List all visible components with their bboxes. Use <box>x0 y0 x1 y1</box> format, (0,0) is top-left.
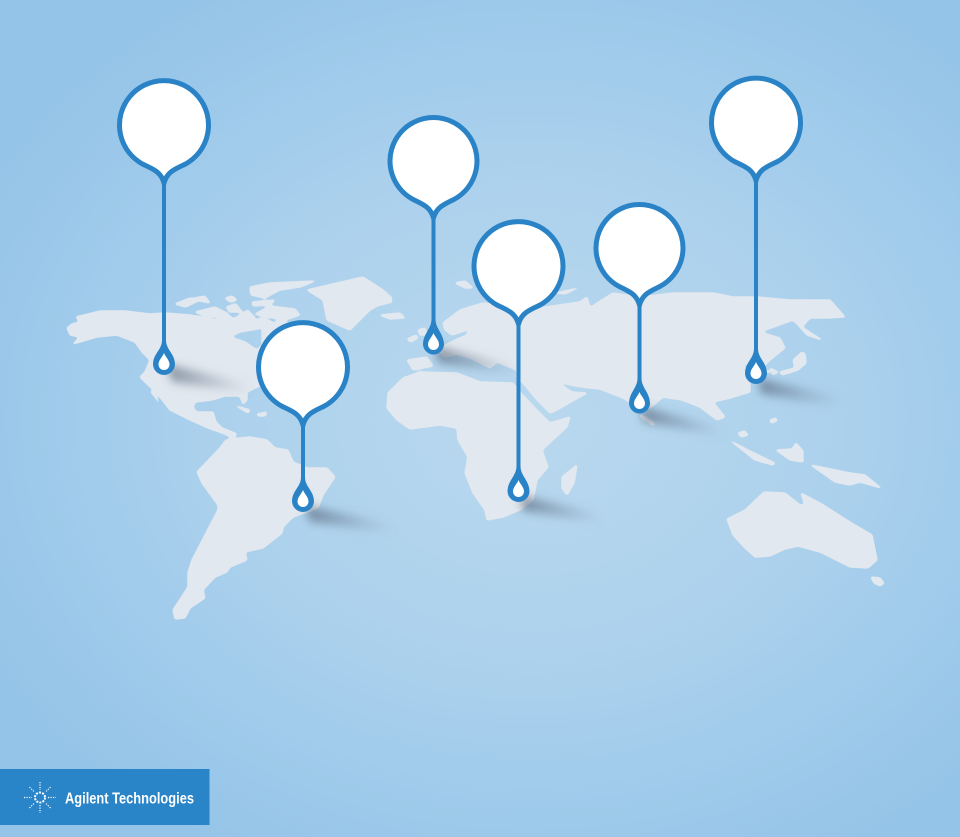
pin shadow: East Asia <box>758 378 844 408</box>
map pin 5: South Asia <box>596 205 683 414</box>
landmass: Greenland <box>307 277 392 330</box>
pin shadow: Africa <box>520 495 604 524</box>
landmass: Caribbean islands <box>236 406 267 416</box>
map pin 3: Europe <box>390 118 477 354</box>
landmass: Iberia <box>407 357 433 370</box>
landmass: New Zealand <box>871 577 884 586</box>
landmass: Svalbard and Arctic Russia <box>455 281 578 294</box>
landmass: Iceland and Greenland tip <box>380 297 405 319</box>
landmass: Eurasia <box>440 293 845 420</box>
pin shadow: North America <box>166 364 252 394</box>
logo wordmark: Agilent Technologies <box>65 790 194 808</box>
landmass: Japan <box>770 352 806 375</box>
landmass: North America <box>67 311 305 438</box>
landmass: Indonesia and Philippines <box>731 418 881 488</box>
map pin 2: South America <box>258 323 348 512</box>
landmass: Africa <box>387 372 570 520</box>
landmass: Australia <box>727 492 877 568</box>
world map <box>67 277 884 619</box>
landmass: Madagascar <box>562 465 577 495</box>
landmass: Arctic islands <box>175 281 315 325</box>
landmass: Southeast Asia islands <box>640 415 655 425</box>
pin shadow: South America <box>305 505 397 534</box>
map pin 1: North America <box>120 81 208 375</box>
landmass: British Isles <box>407 328 427 342</box>
logo panel <box>0 769 210 825</box>
map pin 6: East Asia <box>712 78 800 384</box>
map pin 4: Africa <box>474 222 563 502</box>
pin shadow: South Asia <box>641 406 727 438</box>
pin shadow: Europe <box>435 346 522 376</box>
landmass: South America <box>173 437 335 619</box>
landmass: Baja California <box>151 390 159 403</box>
icon: Agilent starburst <box>24 782 56 813</box>
